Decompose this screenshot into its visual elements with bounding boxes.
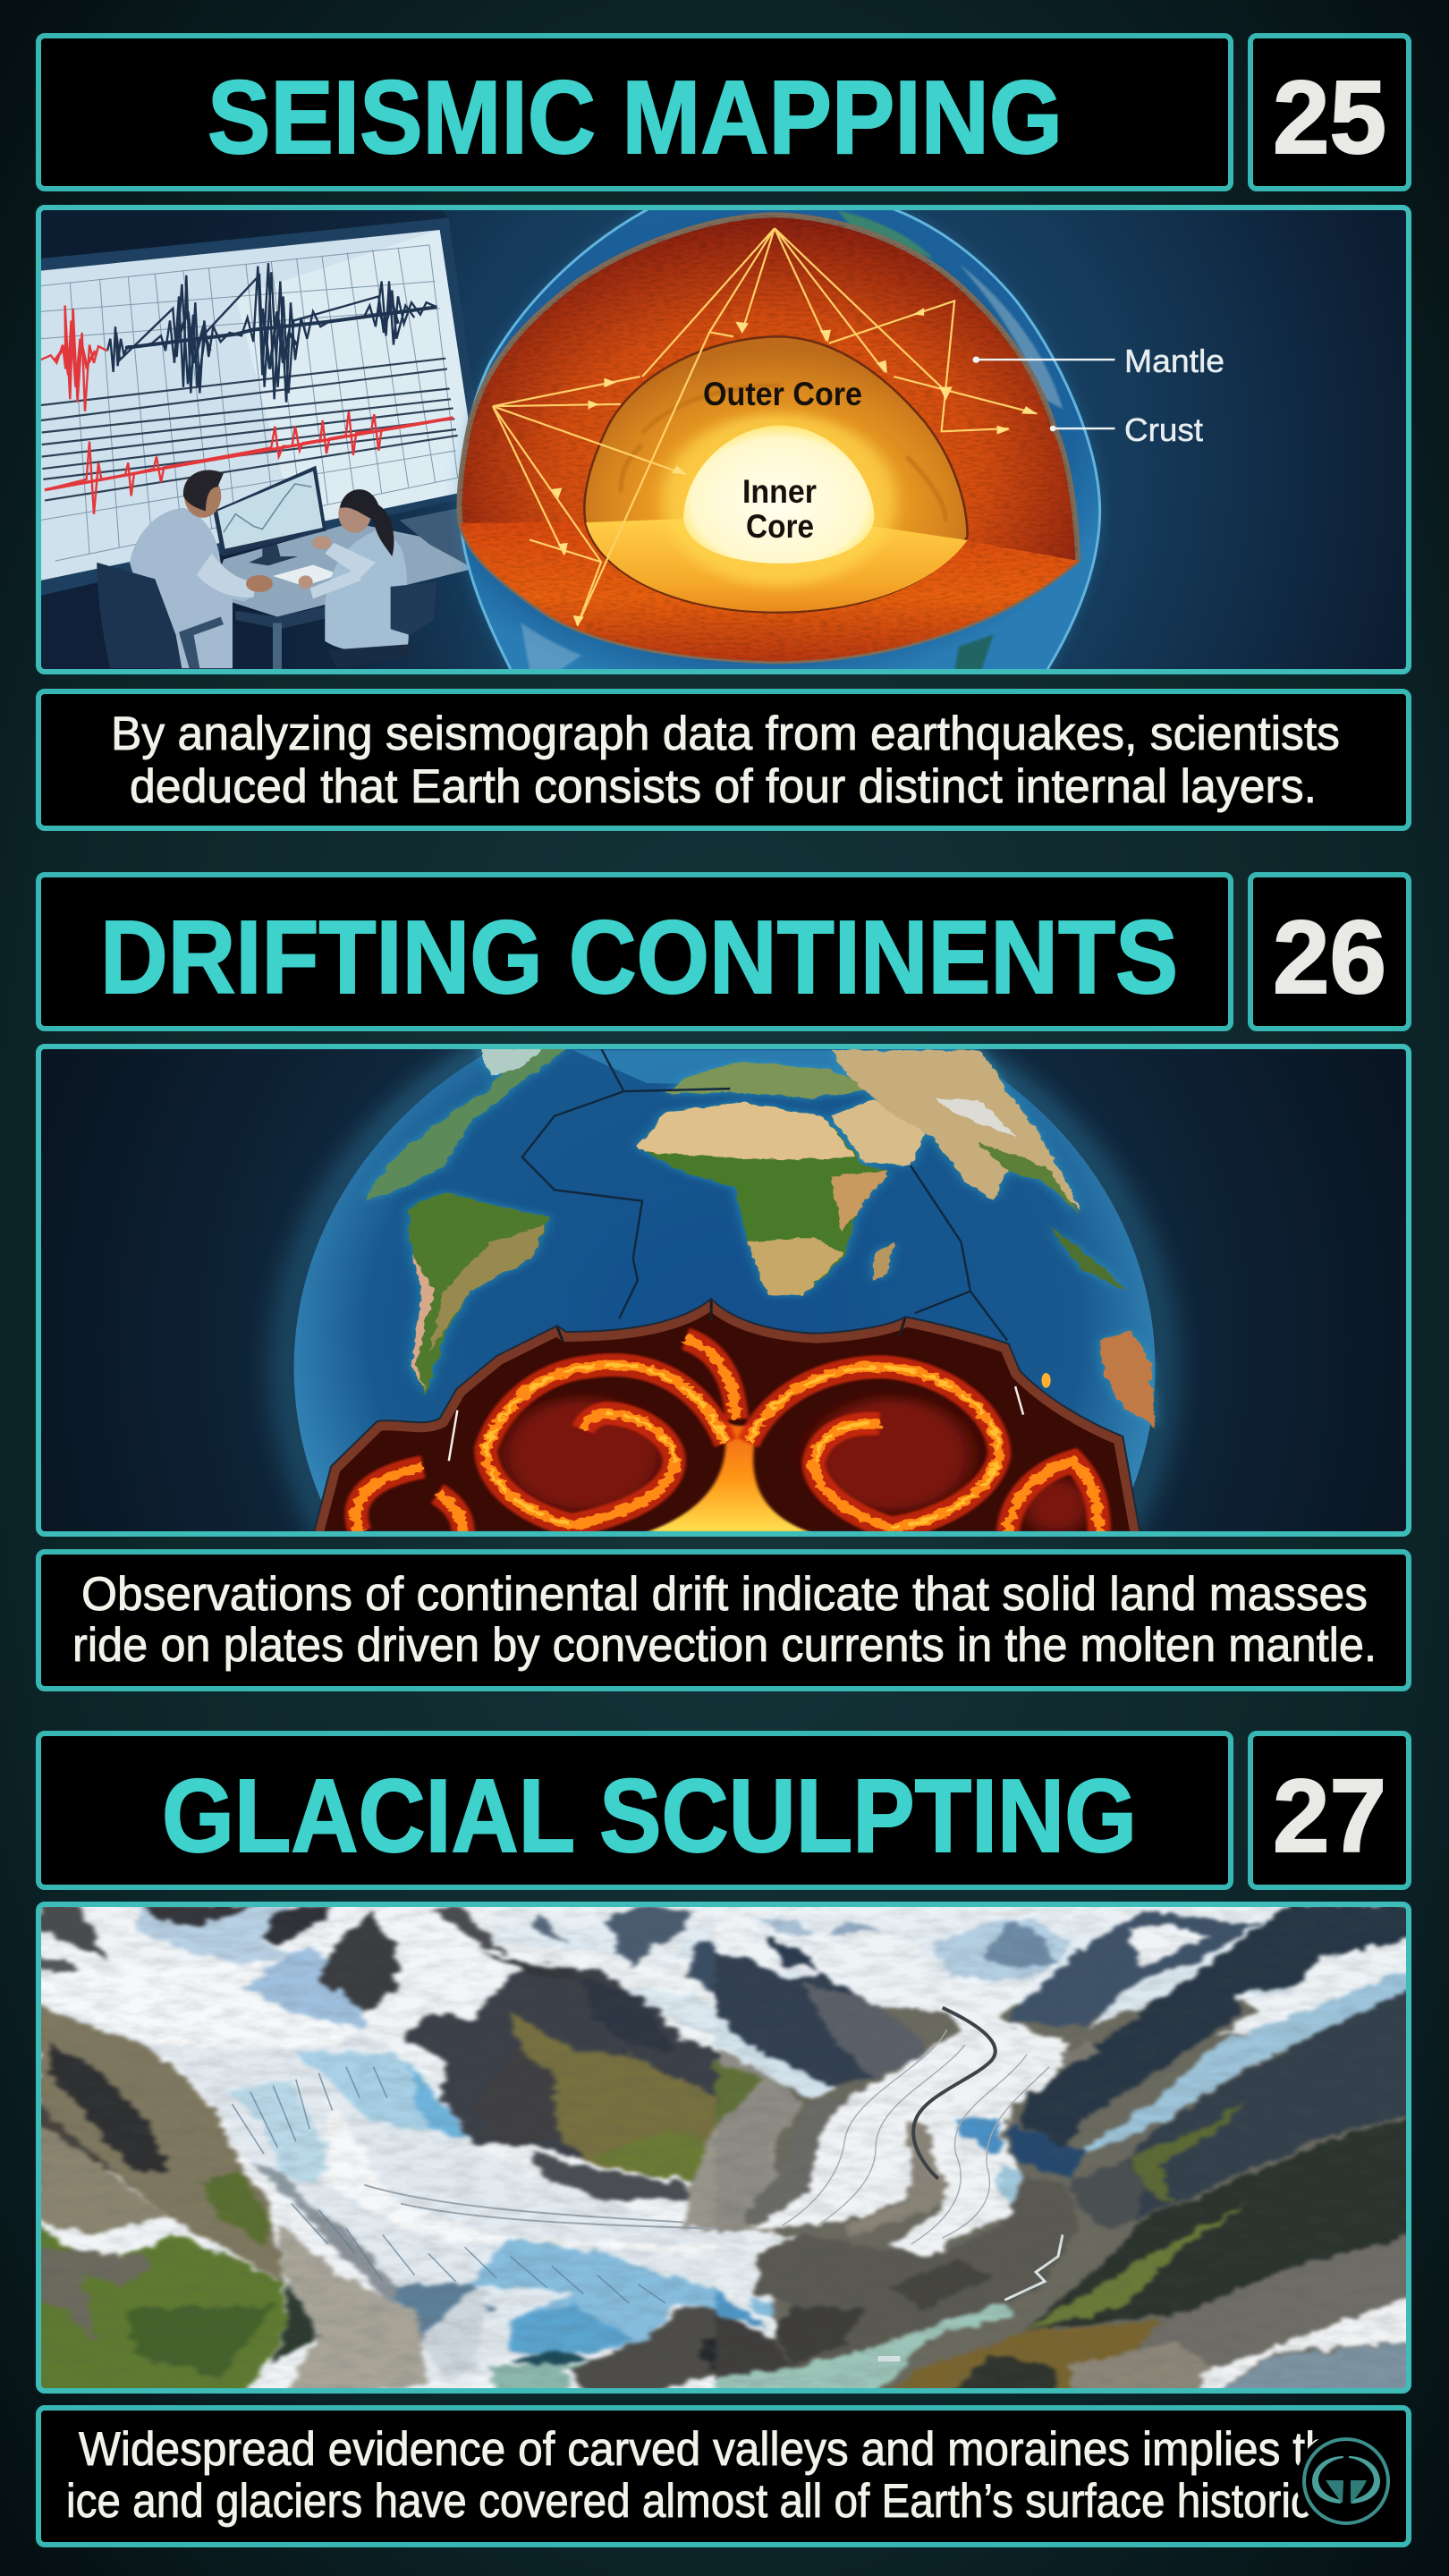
illustration: seismograph wall display and analysts xyxy=(38,206,480,677)
caption box 27: Widespread evidence of carved valleys and moraines implies that xyxy=(79,2423,1367,2476)
caption box 25: deduced that Earth consists of four distinct internal layers. xyxy=(130,760,1317,813)
mantle with crust xyxy=(460,215,1078,661)
caption box 26: Observations of continental drift indicate that solid land masses xyxy=(81,1568,1368,1621)
left peak and snow xyxy=(314,1911,405,2014)
crevasses xyxy=(232,2067,665,2303)
section 25: seismic mapping xyxy=(38,36,1409,828)
woman analyst xyxy=(325,530,409,653)
inner core xyxy=(683,426,874,564)
monitor xyxy=(213,466,326,556)
number box 26: 26 xyxy=(1273,899,1386,1015)
illustration: glacier valley, right half xyxy=(716,1899,1436,2409)
title box: drifting continents: DRIFTING CONTINENTS xyxy=(100,899,1178,1015)
label: inner core: Inner xyxy=(742,473,817,510)
left lower xyxy=(716,2048,804,2232)
number box 27 xyxy=(1250,1733,1409,1887)
paper on desk xyxy=(273,565,333,585)
man analyst xyxy=(130,508,253,668)
glacier flow streaks xyxy=(783,2029,1049,2244)
seismic wave rays xyxy=(493,228,1037,626)
number box 25: 25 xyxy=(1273,59,1386,175)
caption box 25 xyxy=(38,691,1409,828)
number box 26 xyxy=(1250,875,1409,1029)
rock texture overlay xyxy=(41,1907,1407,2388)
title box: drifting continents xyxy=(38,875,1231,1029)
centre mountain xyxy=(401,1968,775,2182)
snow valley xyxy=(716,1914,1067,2014)
talus xyxy=(277,2223,428,2409)
illustration: mantle convection cutaway xyxy=(315,1300,1140,1532)
lower moraine xyxy=(756,2175,1080,2365)
back right mountain xyxy=(1004,1911,1263,2027)
image panel: globe with convection xyxy=(38,990,1409,1746)
title box: glacial sculpting: GLACIAL SCULPTING xyxy=(162,1758,1137,1874)
label: inner core xyxy=(742,473,817,545)
convection swirls: glow xyxy=(357,1339,1099,1532)
convection swirls: core xyxy=(357,1339,1099,1532)
label: crust: Crust xyxy=(1124,411,1203,448)
medial moraine band xyxy=(844,2123,949,2234)
image panel: glacier landscape xyxy=(27,1899,1436,2409)
illustration: glacier valley, left half xyxy=(27,1899,775,2409)
boat on lake xyxy=(878,2356,900,2361)
lower left hill xyxy=(36,2223,289,2409)
caption box 27 xyxy=(38,2408,1409,2545)
outer core xyxy=(584,336,968,613)
caption box 26: ride on plates driven by convection currents in the molten mantle. xyxy=(72,1619,1377,1672)
main glacier xyxy=(36,1964,775,2384)
left slope xyxy=(36,2004,283,2282)
number box 27: 27 xyxy=(1273,1758,1386,1874)
medial moraine line xyxy=(913,2008,996,2179)
main glacier xyxy=(751,1996,1067,2257)
dark right mountain xyxy=(1018,1905,1436,2148)
number box 25 xyxy=(1250,36,1409,189)
leader lines xyxy=(972,356,1114,431)
central plume xyxy=(646,1419,811,1532)
title box: seismic mapping: SEISMIC MAPPING xyxy=(208,59,1063,175)
section 27: glacial sculpting xyxy=(27,1733,1436,2545)
icon: circular logo watermark xyxy=(1296,2431,1396,2531)
plate boundaries xyxy=(522,1047,1007,1341)
caption box 25: By analyzing seismograph data from earthquakes, scientists xyxy=(111,708,1340,760)
label: mantle: Mantle xyxy=(1124,343,1224,379)
lake and rocks xyxy=(492,2362,597,2409)
lake xyxy=(716,2303,1013,2409)
far peaks xyxy=(529,1911,570,1945)
right lower slopes xyxy=(1022,2107,1436,2331)
illustration: earth cross-section xyxy=(447,208,1123,673)
mantle lower face xyxy=(461,519,1078,661)
earth globe xyxy=(460,208,1100,673)
image panel: seismograph and earth cross-section xyxy=(38,206,1409,677)
subduction arrows xyxy=(449,1386,1023,1461)
crust rim xyxy=(315,1300,1140,1532)
meltwater river xyxy=(1004,2234,1063,2300)
title box: glacial sculpting xyxy=(38,1733,1231,1887)
title box: seismic mapping xyxy=(38,36,1231,189)
moraine debris beside glacier xyxy=(1013,2038,1098,2104)
caption box 26 xyxy=(38,1552,1409,1689)
earth glow xyxy=(460,208,1100,673)
ocean xyxy=(294,990,1156,1746)
left mountains xyxy=(716,1952,929,2092)
label: outer core: Outer Core xyxy=(703,376,862,412)
inner core glow xyxy=(662,413,896,586)
section 26: drifting continents xyxy=(38,875,1409,1746)
label: inner core: Core xyxy=(746,508,814,545)
continents xyxy=(365,1047,1156,1428)
desk xyxy=(212,523,474,617)
illustration: earth globe xyxy=(288,990,1161,1746)
